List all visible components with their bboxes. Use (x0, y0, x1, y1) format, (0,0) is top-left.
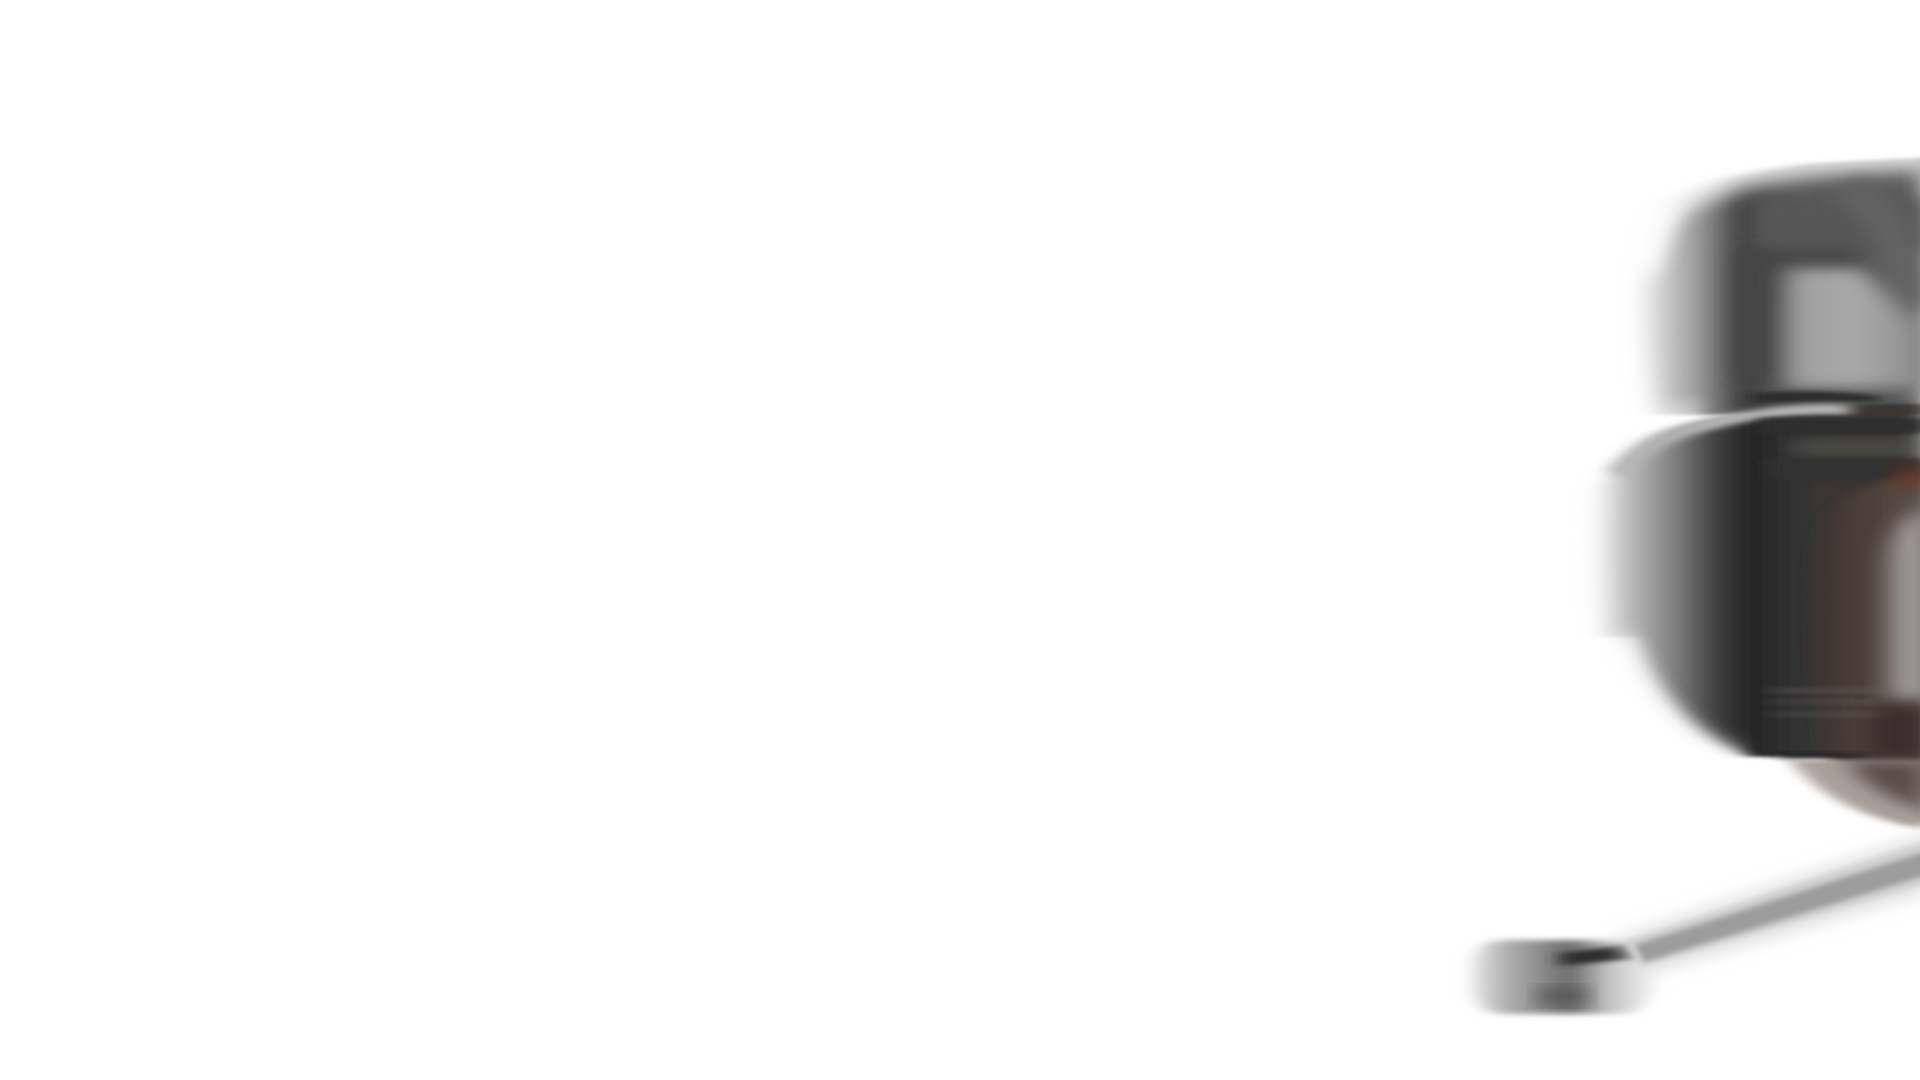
earpad brown (1814, 462, 1920, 825)
microphone boom (1610, 834, 1920, 972)
headset lower earcup (1600, 391, 1920, 829)
microphone head (1472, 940, 1652, 1014)
headset upper earcup (1640, 150, 1920, 415)
